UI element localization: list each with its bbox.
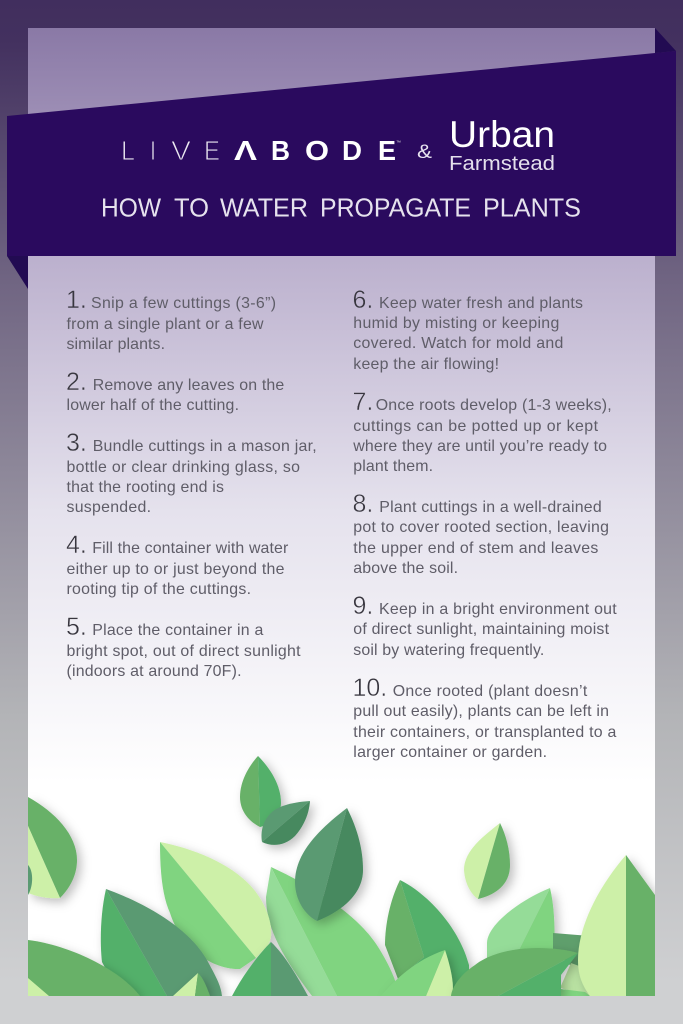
- ribbon fold left: [7, 256, 28, 289]
- step 2: [66, 368, 284, 414]
- step 8: above the soil.: [353, 560, 458, 577]
- leaf: right pale green: [487, 888, 555, 960]
- step 10: their containers, or transplanted to a: [353, 724, 616, 741]
- step 10: [352, 674, 616, 761]
- header ribbon: [7, 51, 676, 256]
- step 1: from a single plant or a few: [66, 316, 264, 333]
- step 10: Once rooted (plant doesn’t: [393, 683, 588, 700]
- leaf: small bottom: [173, 973, 210, 996]
- step 4: [66, 531, 289, 598]
- step 6: covered. Watch for mold and: [353, 335, 563, 352]
- leaf: small top: [240, 756, 281, 827]
- step 5: Place the container in a: [92, 622, 263, 639]
- step 3: 3.: [66, 429, 87, 457]
- ribbon fold right: [655, 28, 676, 53]
- step 4: 4.: [66, 531, 87, 559]
- step 9: 9.: [352, 592, 373, 620]
- step 10: pull out easily), plants can be left in: [353, 703, 609, 720]
- step 6: Keep water fresh and plants: [379, 295, 583, 312]
- step 7: [352, 388, 612, 475]
- step 5: [66, 613, 301, 680]
- logo: Live Abode: D: [342, 135, 362, 166]
- step 6: 6.: [352, 286, 373, 314]
- title: PLANTS: [483, 192, 581, 222]
- logo: Live Abode: L: [121, 135, 135, 166]
- leaf: right middle: [385, 880, 469, 996]
- leaf: floating light: [464, 823, 510, 899]
- leaf: pale center: [160, 842, 271, 969]
- ampersand: &: [417, 142, 432, 163]
- step 4: Fill the container with water: [92, 540, 289, 557]
- logo: Live Abode: E: [204, 135, 220, 166]
- step 1: 1.: [66, 286, 87, 314]
- step 3: Bundle cuttings in a mason jar,: [93, 438, 317, 455]
- step 2: lower half of the cutting.: [66, 397, 239, 414]
- logo: Live Abode: E: [378, 135, 396, 166]
- title: [101, 192, 581, 222]
- step 5: (indoors at around 70F).: [66, 663, 242, 680]
- step 9: Keep in a bright environment out: [379, 601, 617, 618]
- leaf: left edge: [28, 797, 77, 898]
- leaf: small dark: [261, 801, 310, 845]
- logo: Urban Farmstead: Farmstead: [449, 152, 555, 175]
- steps: left column: [66, 286, 317, 680]
- leaf: far right: [578, 855, 655, 996]
- illustration: green leaves: [28, 756, 655, 996]
- step 7: plant them.: [353, 458, 433, 475]
- leaf: large green: [266, 867, 398, 996]
- logo: Urban Farmstead: Urban: [449, 113, 555, 155]
- step 3: that the rooting end is: [66, 479, 224, 496]
- step 10: 10.: [352, 674, 387, 702]
- title: PROPAGATE: [320, 192, 471, 222]
- leaf: small front: [395, 950, 460, 996]
- step 7: where they are until you’re ready to: [352, 438, 607, 455]
- step 1: [66, 286, 276, 353]
- step 7: Once roots develop (1-3 weeks),: [376, 397, 612, 414]
- logo: Live Abode: V: [171, 135, 191, 166]
- leaf: front bottom: [451, 948, 578, 996]
- step 1: similar plants.: [66, 336, 165, 353]
- step 4: rooting tip of the cuttings.: [66, 581, 251, 598]
- leaf: dark lower left: [101, 889, 222, 996]
- logo: Live Abode: ™: [396, 140, 401, 146]
- title: HOW: [101, 192, 161, 222]
- step 8: Plant cuttings in a well-drained: [379, 499, 602, 516]
- title: TO: [174, 192, 209, 222]
- step 2: Remove any leaves on the: [93, 377, 284, 394]
- step 8: the upper end of stem and leaves: [353, 540, 598, 557]
- step 6: humid by misting or keeping: [353, 315, 559, 332]
- step 9: [352, 592, 617, 659]
- step 5: 5.: [66, 613, 87, 641]
- logo: Live Abode: B: [271, 135, 290, 166]
- step 3: suspended.: [66, 499, 151, 516]
- step 9: of direct sunlight, maintaining moist: [353, 621, 610, 638]
- logo: Urban Farmstead: [449, 113, 555, 175]
- leaf: bottom left: [28, 940, 140, 996]
- steps: right column: [352, 286, 617, 761]
- logo: Live Abode: Λ: [234, 135, 257, 166]
- step 2: 2.: [66, 368, 87, 396]
- leaf: big dark: [295, 808, 363, 921]
- step 3: [66, 429, 317, 516]
- step 4: either up to or just beyond the: [66, 561, 285, 578]
- logo: Live Abode: O: [305, 135, 329, 166]
- step 8: 8.: [352, 490, 373, 518]
- logo: Live Abode: I: [150, 135, 156, 166]
- step 6: [352, 286, 583, 373]
- title: WATER: [220, 192, 308, 222]
- step 3: bottle or clear drinking glass, so: [66, 459, 300, 476]
- step 9: soil by watering frequently.: [353, 642, 544, 659]
- step 7: cuttings can be potted up or kept: [353, 418, 599, 435]
- step 8: pot to cover rooted section, leaving: [353, 519, 609, 536]
- step 6: keep the air flowing!: [353, 356, 499, 373]
- step 8: [352, 490, 609, 577]
- step 7: 7.: [352, 388, 373, 416]
- step 1: Snip a few cuttings (3-6”): [91, 295, 276, 312]
- leaf: bottom triangle: [232, 942, 308, 996]
- logo: Live Abode: [121, 135, 401, 166]
- step 10: larger container or garden.: [353, 744, 547, 761]
- step 5: bright spot, out of direct sunlight: [66, 643, 301, 660]
- leaf: back dark: [553, 933, 590, 996]
